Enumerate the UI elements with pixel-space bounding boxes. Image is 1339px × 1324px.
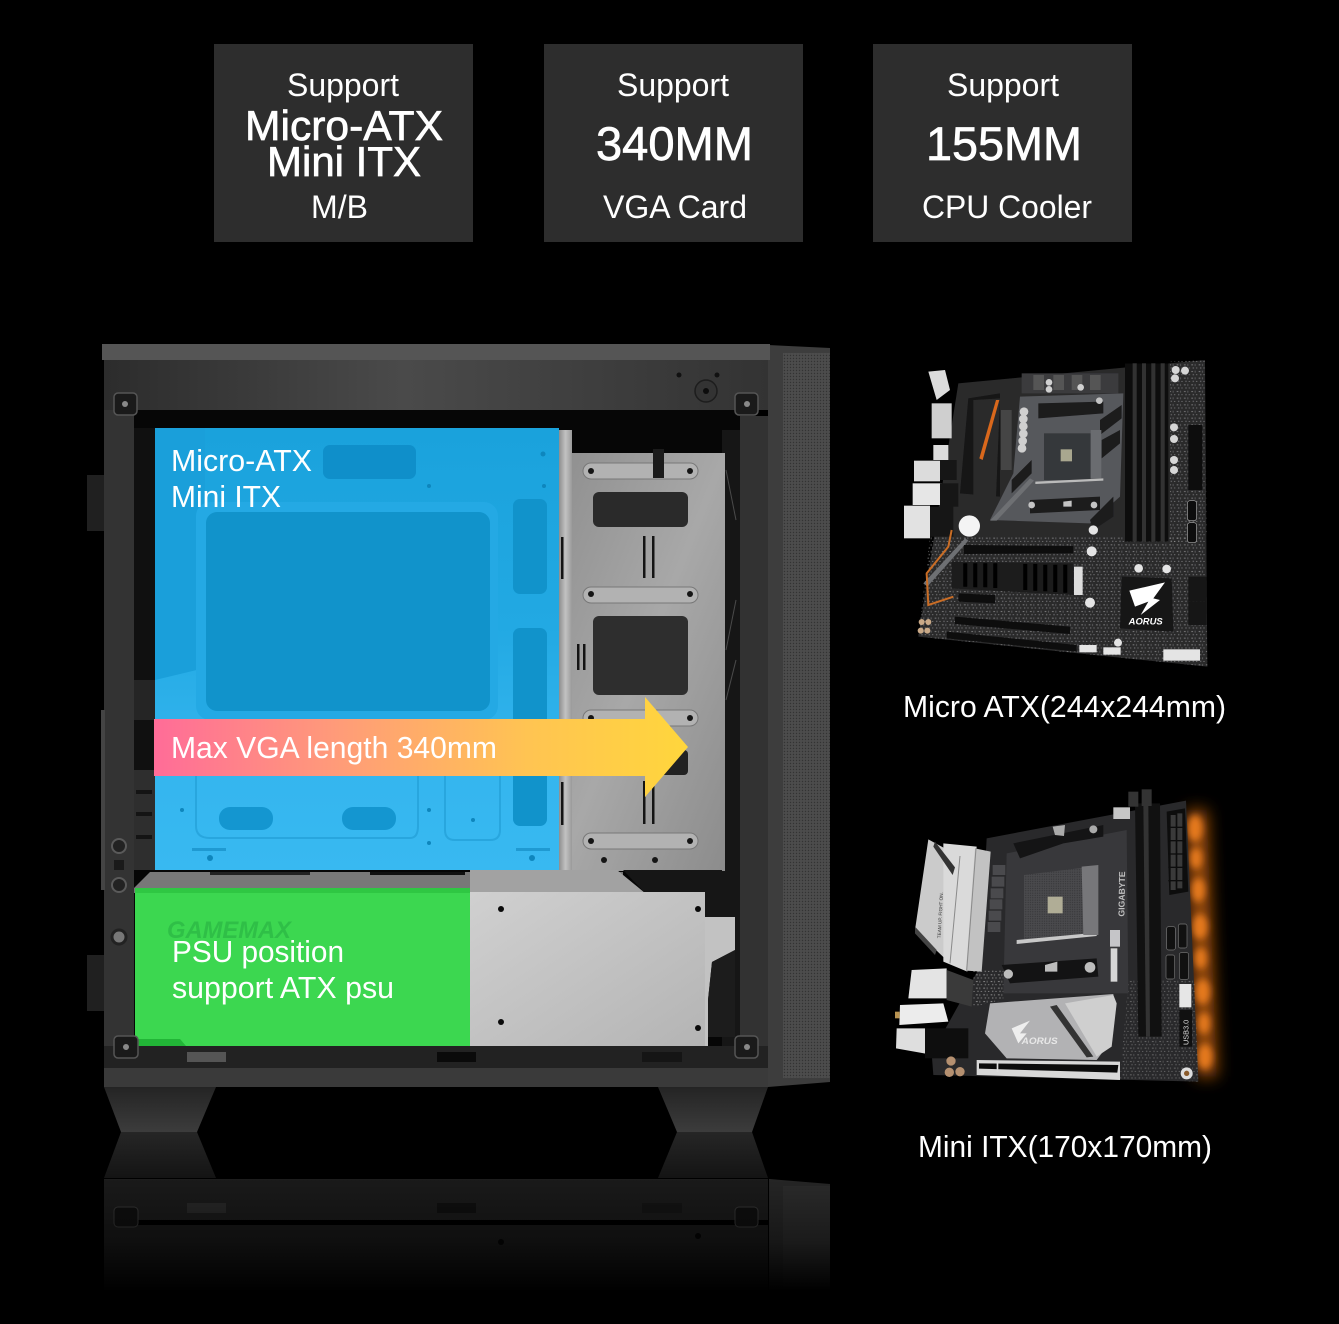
text: Support: Support <box>947 67 1059 103</box>
capacitors and ATX connector <box>1170 366 1202 543</box>
case top band <box>102 344 770 410</box>
AORUS M.2 heatsink <box>985 994 1117 1060</box>
top and bottom CPU brackets <box>1030 402 1103 513</box>
case feet <box>104 1087 768 1132</box>
text: AORUS: AORUS <box>1021 1036 1058 1046</box>
top power stages <box>1022 373 1118 393</box>
RAM slots <box>1125 363 1168 542</box>
label: PSU position: PSU position <box>172 934 344 969</box>
label: Micro-ATX: Micro-ATX <box>171 443 312 478</box>
case right post <box>722 416 768 1050</box>
case reflection <box>100 1132 835 1292</box>
heading: Micro-ATX: Micro-ATX <box>245 102 443 149</box>
silver capacitors lower left <box>918 619 931 634</box>
metal back plate <box>559 430 725 871</box>
panel: motherboard support <box>214 44 473 242</box>
rear IO ports <box>904 370 958 538</box>
label: support ATX psu: support ATX psu <box>172 970 394 1005</box>
illustration: Micro ATX motherboard <box>904 360 1207 667</box>
power supply unit <box>470 892 735 1046</box>
logo: GAMEMAX: GAMEMAX <box>167 917 293 944</box>
CMOS battery <box>959 515 980 537</box>
case interior <box>134 410 740 1050</box>
board body <box>932 801 1198 1082</box>
caption: Mini ITX size: Mini ITX(170x170mm) <box>918 1129 1212 1164</box>
text: Support: Support <box>287 67 399 103</box>
M.2 heatsink <box>952 562 1083 595</box>
illustration: PC case interior <box>87 344 835 1292</box>
bottom header connectors <box>1079 525 1200 661</box>
bracket highlights <box>1028 397 1103 508</box>
component speckle <box>918 537 1207 667</box>
capacitors <box>945 1056 1193 1079</box>
PSU shroud <box>134 870 722 917</box>
VRM capacitors <box>1018 407 1028 453</box>
RAM slots <box>1113 789 1162 1037</box>
heatsink print: TEAM UP. FIGHT ON. <box>937 892 944 938</box>
VRM heatsink with orange accent <box>960 393 1012 500</box>
case right side panel <box>768 345 830 1087</box>
bracket highlights <box>1053 825 1097 836</box>
SATA ports <box>1188 577 1207 625</box>
panel: CPU cooler support <box>873 44 1132 242</box>
heading: Mini ITX: Mini ITX <box>267 138 421 185</box>
case bottom rail <box>104 1036 768 1087</box>
glow hotspots <box>1188 815 1212 1069</box>
silkscreen brand: GIGABYTE <box>1116 871 1127 917</box>
label: Max VGA length: Max VGA length 340mm <box>171 730 497 765</box>
PCIe slot <box>977 1060 1120 1080</box>
case left post <box>87 410 155 1050</box>
orange underglow <box>1187 810 1217 1077</box>
caption: Micro ATX size: Micro ATX(244x244mm) <box>903 689 1226 724</box>
illustration: Mini ITX motherboard <box>895 789 1217 1082</box>
top corner brackets <box>114 393 758 415</box>
top VRM bracket <box>1013 825 1103 858</box>
rear IO ports <box>895 968 973 1058</box>
white header pins <box>1179 984 1191 1007</box>
text: M/B: M/B <box>311 189 368 225</box>
ATX power connector <box>1167 808 1188 895</box>
light diagonal stripes <box>923 478 1034 587</box>
heading: 340MM: 340MM <box>596 117 753 170</box>
lower PCIe slots <box>947 593 1077 652</box>
board body <box>918 360 1207 667</box>
text: AORUS: AORUS <box>1128 616 1163 626</box>
lower CPU bracket <box>1002 958 1098 983</box>
PCIe x16 slot <box>964 545 1073 554</box>
silver VRM heatsink <box>915 839 991 972</box>
label stickers <box>1110 930 1120 982</box>
motherboard area highlight <box>155 428 559 870</box>
PSU area highlight <box>135 888 470 1046</box>
component speckle left <box>973 970 1003 1007</box>
text: Support: Support <box>617 67 729 103</box>
bracket highlights <box>1004 962 1095 979</box>
SATA ports <box>1166 924 1189 979</box>
heading: 155MM: 155MM <box>926 117 1082 170</box>
text: VGA Card: VGA Card <box>603 189 747 225</box>
CPU socket <box>1017 865 1098 944</box>
USB3 header <box>1179 1010 1192 1047</box>
right edge components <box>1170 360 1207 543</box>
panel: VGA card support <box>544 44 803 242</box>
AORUS chipset heatsink <box>1120 577 1173 632</box>
diagonal accents <box>1012 405 1122 530</box>
label: Mini ITX: Mini ITX <box>171 479 281 514</box>
VRM chokes <box>988 865 1005 932</box>
CPU socket <box>1035 430 1103 484</box>
component speckle <box>1120 980 1198 1082</box>
CPU area plate <box>990 393 1123 523</box>
CPU area plate <box>1003 830 1128 993</box>
orange trace <box>927 530 953 605</box>
text: CPU Cooler: CPU Cooler <box>922 189 1092 225</box>
arrow: max VGA length <box>154 697 688 797</box>
text: USB3: USB3.0 <box>1181 1020 1190 1045</box>
